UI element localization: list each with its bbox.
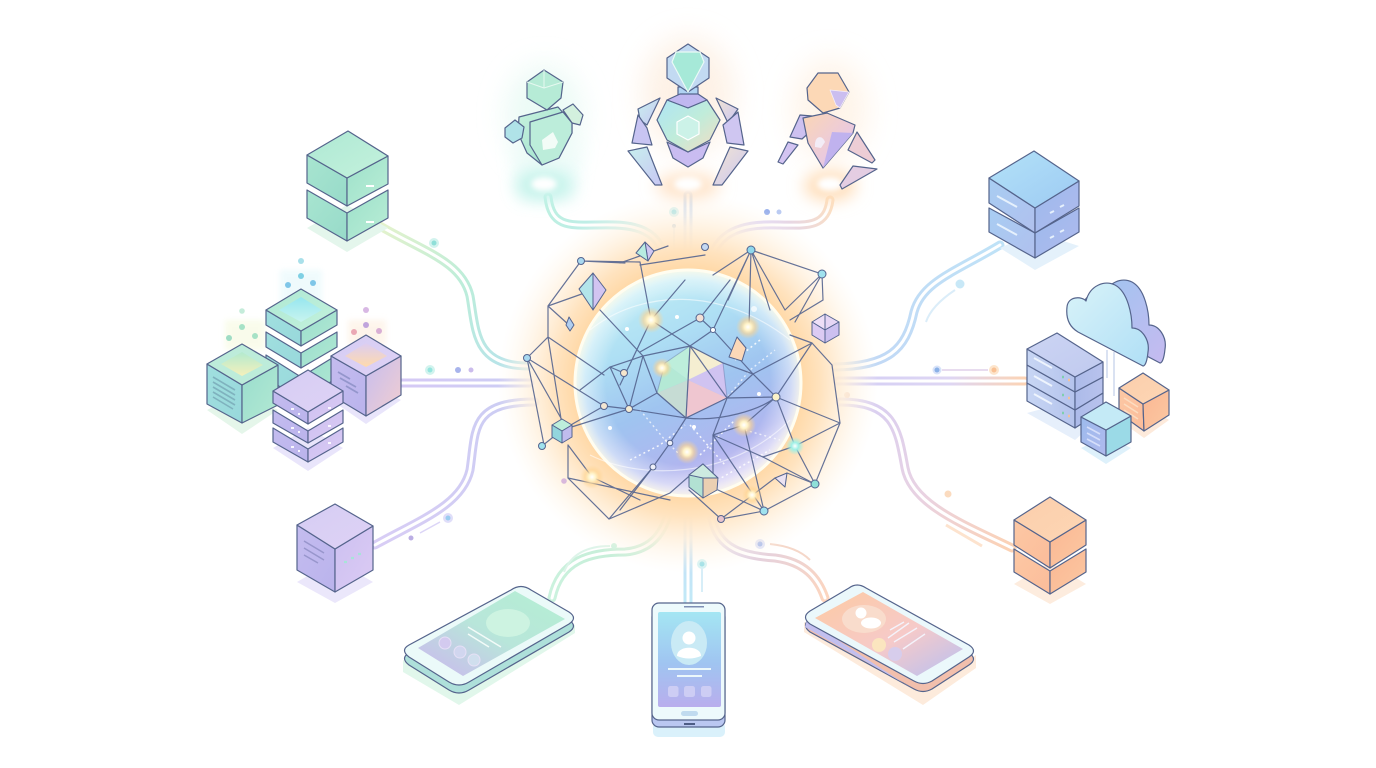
phone shadow xyxy=(403,625,575,705)
device: centre phone xyxy=(652,603,725,737)
phone body xyxy=(652,610,725,727)
phone body xyxy=(404,594,574,693)
cloud connectors xyxy=(1107,350,1114,396)
connector: lower-left cube to hub xyxy=(375,402,535,545)
connector: centre phone to hub xyxy=(684,520,692,602)
node: green server stack top-left xyxy=(307,131,388,252)
connector: centre robot to hub xyxy=(684,195,692,272)
hub orange halo xyxy=(498,193,878,573)
device: right phone xyxy=(804,585,976,705)
phone content xyxy=(439,609,530,666)
connector: orange robot to hub xyxy=(708,200,830,268)
node: orange server stack right xyxy=(1014,497,1086,604)
server stack xyxy=(1027,333,1103,440)
robot base glow xyxy=(642,37,734,199)
connector: top-left server to hub xyxy=(380,226,528,366)
teal cube xyxy=(207,344,278,434)
phone face xyxy=(652,603,725,720)
phone screen xyxy=(815,592,963,676)
front purple stack xyxy=(273,370,343,471)
node: purple cube lower-left xyxy=(297,504,373,603)
node: left server cluster xyxy=(207,258,401,471)
phone face xyxy=(404,586,574,685)
hub glowing sparks xyxy=(580,306,804,505)
glow behind cluster xyxy=(225,270,386,350)
connector: orange stack to hub xyxy=(840,402,1012,548)
purple cube xyxy=(331,335,401,424)
phone content xyxy=(668,606,712,725)
hub centre crystal xyxy=(657,346,727,418)
phone shadow xyxy=(653,722,725,737)
phone content xyxy=(842,605,925,661)
cloud icon xyxy=(1067,280,1165,366)
signal dots on connectors xyxy=(408,207,999,592)
connector: left cluster to hub xyxy=(402,378,530,388)
back green stack xyxy=(266,289,337,400)
central hub: glowing polygon sphere xyxy=(498,193,878,573)
connector: green robot to hub xyxy=(548,197,668,268)
blue small cube xyxy=(1081,402,1131,464)
connector: right phone to hub xyxy=(712,518,825,598)
phone screen xyxy=(658,612,721,707)
hub mesh lines xyxy=(527,246,840,519)
particle dots xyxy=(226,258,382,341)
connectors xyxy=(375,195,1025,602)
node: right cloud cluster xyxy=(1027,280,1169,464)
phone face xyxy=(806,585,974,684)
robot base glow xyxy=(505,65,590,200)
node: blue server stack top-right xyxy=(989,151,1079,270)
connector: top-right server to hub xyxy=(835,245,1000,367)
connector: right cluster to hub xyxy=(838,376,1025,386)
hub sphere xyxy=(574,269,802,497)
connector: left phone to hub xyxy=(552,515,668,598)
phone screen xyxy=(418,591,565,676)
robot: green xyxy=(505,65,590,200)
robot: orange xyxy=(778,58,877,201)
orange cube xyxy=(1119,373,1169,438)
phone body xyxy=(806,593,974,692)
hub gems xyxy=(552,242,839,498)
device: left phone xyxy=(403,586,575,705)
phone shadow xyxy=(804,622,976,705)
robot base glow xyxy=(792,58,868,201)
robot: iridescent centre xyxy=(628,37,748,199)
hub mesh nodes xyxy=(524,244,826,522)
